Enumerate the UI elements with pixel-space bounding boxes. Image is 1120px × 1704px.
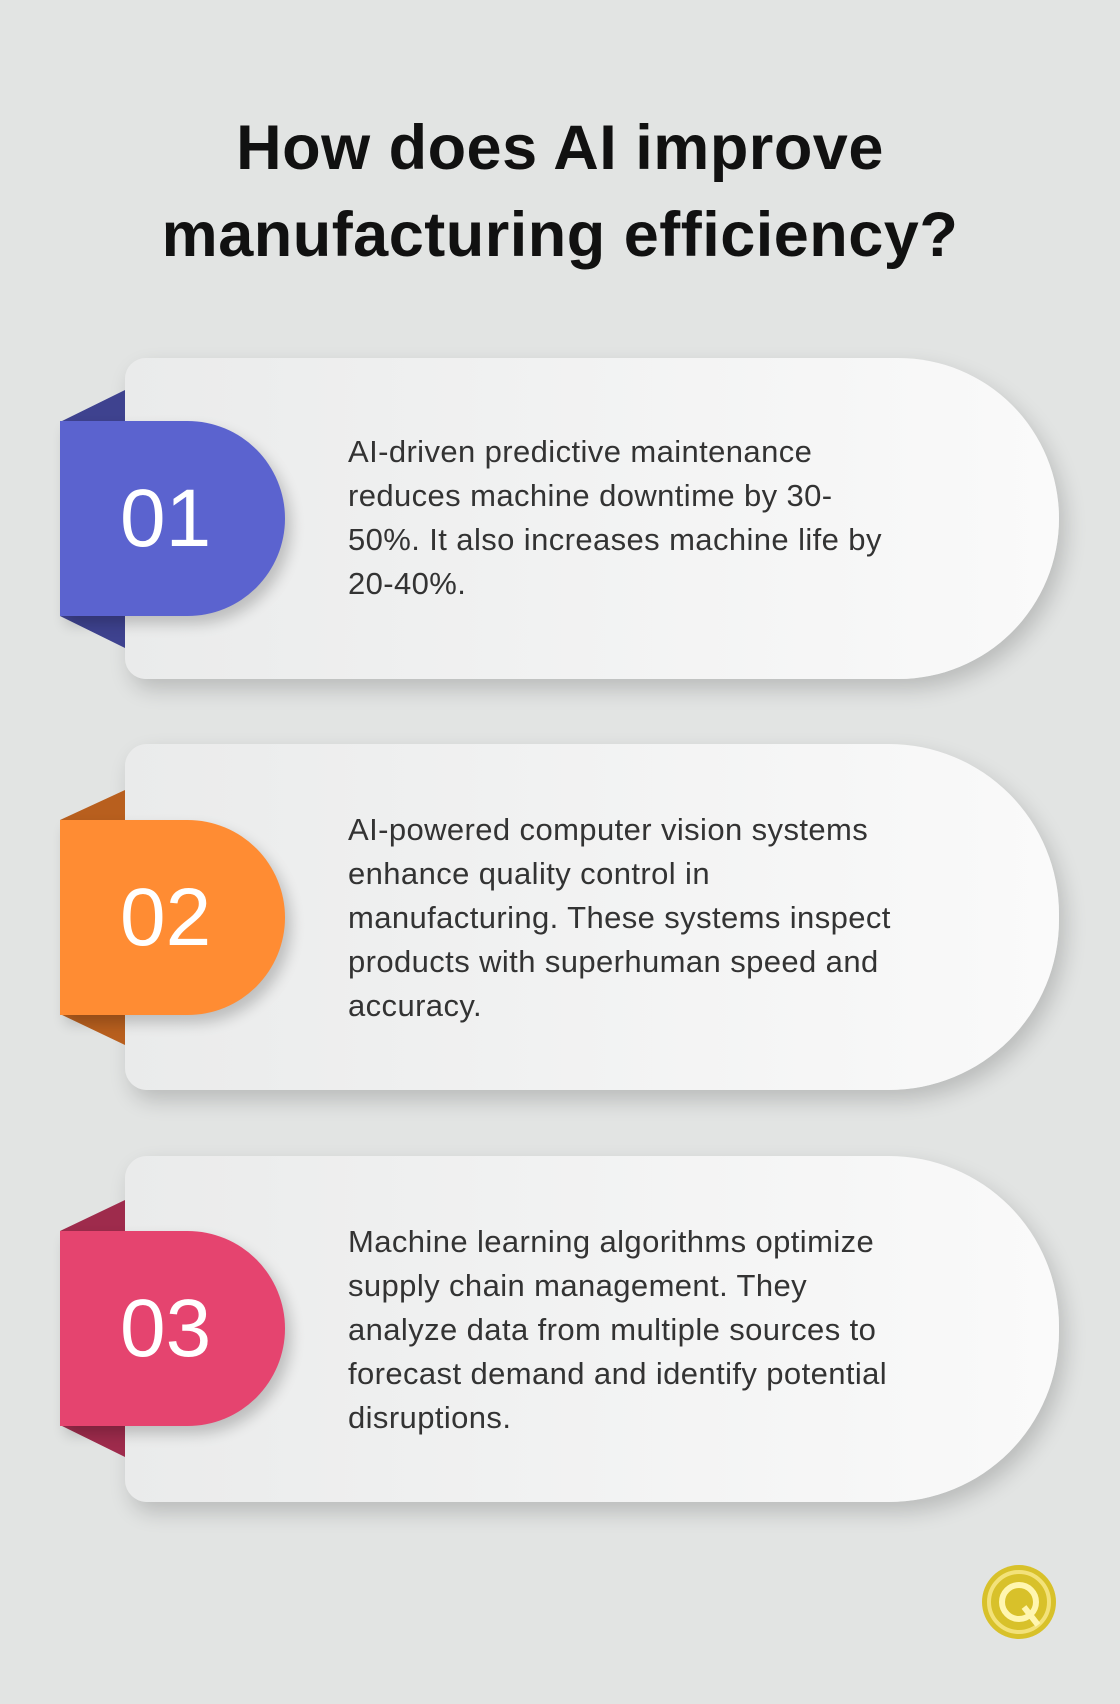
card 1	[125, 358, 1059, 679]
text 2: AI-powered computer vision systems	[348, 812, 868, 847]
card 2	[125, 744, 1059, 1090]
text 1: AI-driven predictive maintenance	[348, 434, 812, 469]
badge 02	[60, 820, 285, 1015]
text 3	[348, 1224, 887, 1435]
badge 01	[60, 421, 285, 616]
title	[162, 113, 958, 270]
badge 01: 01	[120, 473, 211, 564]
text 1: 50%. It also increases machine life by	[348, 522, 882, 557]
fold 3	[60, 1200, 125, 1457]
title: How does AI improve	[236, 113, 884, 183]
panel: step 1	[60, 358, 1074, 698]
text 1: reduces machine downtime by 30-	[348, 478, 833, 513]
badge 02: 02	[120, 872, 211, 963]
text 2: products with superhuman speed and	[348, 944, 879, 979]
text 3: forecast demand and identify potential	[348, 1356, 887, 1391]
fold 1	[60, 390, 125, 648]
text 3: disruptions.	[348, 1400, 511, 1435]
panel: step 2	[60, 744, 1074, 1109]
badge 03: 03	[120, 1283, 211, 1374]
text 2	[348, 812, 891, 1023]
text 1: 20-40%.	[348, 566, 466, 601]
panel: step 3	[60, 1156, 1074, 1521]
text 1	[348, 434, 882, 601]
text 3: analyze data from multiple sources to	[348, 1312, 876, 1347]
icon: logo	[982, 1565, 1056, 1639]
badge 03	[60, 1231, 285, 1426]
fold 2	[60, 790, 125, 1045]
text 3: Machine learning algorithms optimize	[348, 1224, 874, 1259]
text 2: manufacturing. These systems inspect	[348, 900, 891, 935]
text 3: supply chain management. They	[348, 1268, 807, 1303]
card 3	[125, 1156, 1059, 1502]
text 2: accuracy.	[348, 988, 482, 1023]
text 2: enhance quality control in	[348, 856, 710, 891]
title: manufacturing efficiency?	[162, 200, 958, 270]
